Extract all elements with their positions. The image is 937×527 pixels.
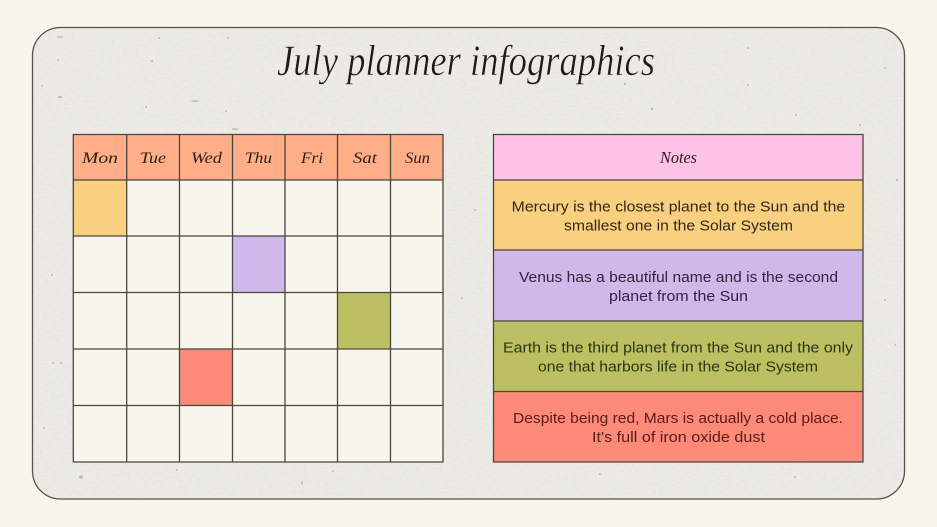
calendar (73, 134, 443, 462)
note: Mars (494, 392, 863, 462)
note: Mercury: Mercury is the closest planet to the Sun and the (512, 200, 845, 216)
note: Mercury (494, 180, 863, 250)
highlighted day: green (338, 292, 390, 349)
note: Venus: Venus has a beautiful name and is the second (519, 270, 838, 286)
calendar header row: Tue (140, 150, 166, 167)
note: Mercury: smallest one in the Solar System (564, 218, 793, 234)
calendar header row (73, 134, 443, 180)
calendar day cells (73, 180, 443, 462)
panel: notes (494, 134, 863, 462)
highlighted day: yellow (73, 180, 127, 236)
highlighted day: red (180, 349, 232, 406)
note: Venus (494, 250, 863, 321)
note: Earth: one that harbors life in the Solar System (538, 360, 818, 376)
note: Mars: Despite being red, Mars is actually a cold place. (513, 411, 843, 427)
note: Earth: Earth is the third planet from the Sun and the only (503, 340, 854, 356)
calendar header row: Mon (81, 150, 118, 167)
calendar header row: Thu (245, 150, 272, 167)
notes heading: Notes (659, 148, 697, 167)
calendar header row: Fri (300, 150, 323, 167)
notes heading (494, 134, 863, 180)
calendar header row: Sun (405, 150, 430, 167)
calendar header row: Sat (353, 150, 378, 167)
calendar header row: Wed (191, 150, 223, 167)
note: Venus: planet from the Sun (609, 289, 748, 305)
note: Earth (494, 321, 863, 392)
title: July planner infographics (277, 38, 655, 85)
highlighted day: purple (232, 236, 285, 292)
note: Mars: It's full of iron oxide dust (592, 430, 765, 446)
